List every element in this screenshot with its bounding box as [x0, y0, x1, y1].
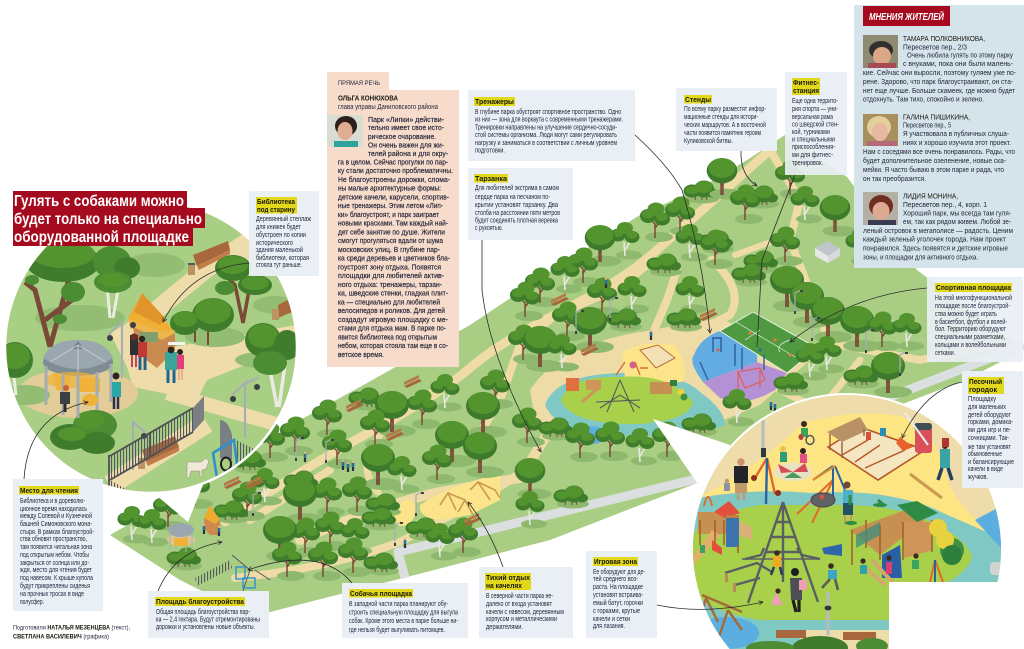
heading: opinions: МНЕНИЯ ЖИТЕЛЕЙ	[869, 10, 945, 23]
panel: quiet rest on swings: Тихий отдых	[486, 574, 530, 582]
panel: direct speech: Парк «Липки» действи-	[368, 116, 445, 124]
panel: dog area	[342, 583, 468, 638]
panel: tarzan swing: с рукоятью.	[475, 225, 503, 232]
panel: direct speech: детские качели, карусели, спортив-	[338, 194, 450, 202]
panel: fitness station: кой, турниками	[792, 128, 830, 136]
panel: library: исторического	[256, 240, 293, 247]
panel: direct speech: телей района и для окру-	[368, 150, 449, 158]
panel: quiet rest on swings: В северной части парка не-	[486, 592, 553, 600]
opinion: Lidia	[863, 194, 1013, 262]
panel: sand town: Площадку	[968, 396, 996, 403]
small gazebo and library	[167, 505, 220, 552]
opinion: Lidia: понравился. Здесь появятся и детские игровые	[863, 246, 1008, 252]
panel: reading place: ства обновят пространство,	[20, 535, 87, 543]
panel: sports ground: ства можно будет играть	[935, 310, 997, 318]
panel: reading place: закрыться от солнца или до-	[20, 560, 89, 567]
panel: trainers: Тренировки направлены на улучшение сердечно-сосуди-	[475, 124, 618, 132]
panel: tarzan swing: крытии установят тарзанку. Два	[475, 202, 558, 209]
panel: direct speech: ные тренажеры. Этим летом «Лип-	[338, 203, 444, 210]
title: Гулять с собаками можно	[14, 193, 184, 210]
panel: library: для книжек будет	[256, 223, 302, 231]
panel: library: под старину	[257, 207, 295, 214]
panel: reading place: на прочных тросах в виде	[20, 591, 84, 598]
panel: play zone: раста. На площадке	[593, 584, 643, 591]
panel: direct speech: московских улиц. В глубине пар-	[338, 246, 441, 254]
dog and tire frame	[186, 438, 238, 478]
left circle paths	[18, 240, 296, 485]
photo: Tamara	[863, 35, 898, 68]
title	[13, 191, 205, 246]
panel: direct speech: стами для отдыха мам. В парке по-	[338, 326, 447, 333]
opinion: Galina	[863, 114, 1015, 183]
big trees in circle	[6, 246, 296, 454]
panel: sand town: городок	[969, 387, 998, 394]
panel: library: стояла тут раньше.	[256, 262, 302, 269]
white wedge to right circle	[653, 419, 730, 500]
panel: quiet rest on swings: далеко от входа установят	[486, 601, 553, 608]
panel: trainers: из них — зона для воркаута с современными тренажерами.	[475, 116, 623, 124]
opinion: Tamara: с внуками, пока они были малень-	[903, 60, 1014, 68]
panel: sand town	[962, 371, 1023, 488]
panel: fitness station: ми для фитнес-	[792, 152, 834, 159]
panel: library: Библиотека	[257, 198, 295, 206]
panel: direct speech: ка — специально для любителей	[338, 298, 440, 306]
opinion: Tamara: рене. Здорово, что парк благоустраивают, он ста-	[863, 78, 1014, 86]
panel: sand town: ми для игр и пе-	[968, 427, 1012, 434]
panel: improvement area: ка — 2,4 гектара. Будут отремонтированы	[156, 616, 260, 624]
panel: direct speech: ОЛЬГА КОНЮХОВА	[338, 96, 398, 102]
opinion: Lidia: каждый зеленый уголочек города. Нам проект	[863, 236, 1007, 244]
arrow: quiet swings	[468, 502, 503, 567]
people at library	[130, 334, 185, 383]
photo: Galina	[863, 114, 898, 146]
panel: direct speech: ки» благоустроят, и парк заиграет	[338, 211, 440, 219]
panel: direct speech: новыми красками. Там каждый най-	[338, 220, 449, 228]
kids near net	[771, 550, 838, 612]
panel: trainers	[468, 90, 635, 161]
panel: direct speech: ку стали достаточно проблематичны.	[338, 167, 453, 175]
panel: play zone: с горками, крутые	[593, 608, 640, 615]
panel: library: библиотеки, которая	[256, 254, 309, 262]
leader arrows	[24, 135, 962, 609]
net pyramid small	[596, 380, 640, 412]
panel: sand town: Песочный	[969, 378, 1002, 386]
trees of the park	[118, 158, 924, 581]
panel: sports ground: сетками.	[935, 350, 955, 357]
panel: tarzan swing: сердце парка на песчаном по-	[475, 194, 551, 201]
panel: quiet rest on swings: качели с навесом, деревянным	[486, 609, 564, 616]
title: будет только на специально	[14, 211, 202, 228]
panel: reading place: там появится читальная зона	[20, 544, 92, 551]
panel: improvement area: дорожки и установлены новые объекты.	[156, 623, 255, 631]
panel: stands: Стенды	[685, 97, 711, 104]
gray road	[398, 345, 1024, 578]
panel: dog area: строить специальную площадку для выгула	[349, 610, 458, 616]
house	[815, 241, 840, 263]
panel: play zone: качели и сетки	[593, 616, 630, 623]
small fenced dog zone	[195, 555, 270, 600]
seesaw	[910, 474, 942, 498]
panel: reading place: ждя, место для чтения будет	[20, 566, 93, 574]
panel: play zone: для лазания.	[593, 623, 625, 630]
panel: dog area: В западной части парка планируют обу-	[349, 600, 449, 608]
arrow: play zone	[657, 602, 763, 609]
panel: direct speech: гоустроят зону отдыха. Появятся	[338, 264, 441, 272]
panel: fitness station: со шведской стен-	[792, 120, 840, 128]
panel: trainers: нагрузку и заниматься в соответствии с личным уровнем	[475, 140, 617, 147]
lamp	[761, 420, 766, 458]
opinion: Tamara: ТАМАРА ПОЛКОВНИКОВА,	[903, 36, 985, 43]
gazebo	[43, 340, 121, 418]
arrow: tarzan	[482, 240, 541, 452]
panel: direct speech: глава управы Даниловского района	[338, 103, 438, 111]
panel: tarzan swing: Тарзанка	[475, 176, 507, 183]
panel: library	[249, 191, 319, 276]
white wedge to left circle	[150, 480, 205, 522]
man with child	[938, 438, 952, 480]
panel: reading place: ционное время находилась	[20, 506, 87, 513]
panel: sports ground: кольцами и волейбольными	[935, 341, 1006, 349]
panel: quiet rest on swings: корпусом и металлическими	[486, 616, 557, 623]
panel: sand town: же там установят	[968, 444, 1012, 451]
panel: improvement area: Площадь благоустройства	[156, 598, 244, 606]
panel: library: Деревянный стеллаж	[256, 215, 311, 223]
credits: Подготовили НАТАЛЬЯ МЕЗЕНЦЕВА (текст),	[13, 624, 130, 632]
panel: fitness station	[785, 72, 847, 175]
panel: direct speech: велосипедов и роликов. Для детей	[338, 307, 445, 315]
panel: reading place: башней Симоновского мона-	[20, 520, 93, 528]
panel: fitness station: рия спорта — уни-	[792, 106, 839, 113]
panel: improvement area	[148, 591, 269, 638]
photo: Lidia	[863, 192, 898, 225]
heading: opinions	[863, 6, 950, 26]
panel: direct speech: Он очень важен для жи-	[368, 142, 445, 150]
arrow: library	[163, 263, 249, 322]
panel: dog area: собак. Кроме этого места в парке больше ни-	[349, 617, 458, 625]
lime zone	[692, 505, 972, 620]
panel: direct speech: га в целом. Сейчас прогулки по пар-	[338, 158, 449, 166]
panel: stands: части появится памятник героям	[684, 130, 761, 137]
net swing	[797, 466, 845, 523]
right play structure	[822, 495, 964, 585]
panel: sand town: для маленьких	[968, 404, 1006, 411]
panel: sand town: жучков.	[968, 474, 988, 481]
panel: direct speech: площадки для любителей актив-	[338, 272, 445, 280]
panel: fitness station: Еще одна террито-	[792, 98, 838, 105]
blue puddle and sand bottom	[710, 617, 759, 649]
credits	[13, 624, 130, 640]
quiet swings zone	[389, 474, 500, 530]
park map	[110, 135, 1024, 615]
playground zones	[545, 344, 725, 444]
bench and bin	[138, 241, 292, 469]
photo: Olga Konyukhova	[327, 115, 363, 147]
opinion: Galina: мейки. Я часто бываю в этом парке и рада, что	[863, 166, 1004, 174]
panel: sports ground: Спортивная площадка	[936, 285, 1011, 292]
park ground	[110, 135, 1024, 615]
panel: fitness station: Фитнес-	[793, 80, 820, 87]
panel: direct speech: Не благоустроены дорожки, слома-	[338, 176, 451, 184]
panel: stands: мационные стенды для истори-	[684, 114, 758, 121]
panel: play zone: Ее оборудуют для де-	[593, 568, 645, 576]
credits: СВЕТЛАНА ВАСИЛЕВИЧ (графика)	[13, 634, 109, 640]
opinion: Tamara: нет еще лучше. Больше скамеек, где можно будет	[863, 87, 1016, 95]
panel: direct speech: ветское время.	[338, 352, 384, 359]
panel: direct speech: ного отдыха: тренажеры, тарзан-	[338, 282, 443, 289]
left circle shadows	[0, 253, 297, 405]
arrow: fitness	[757, 175, 795, 347]
opinion: Galina: Пересветов пер., 5	[903, 122, 951, 130]
title: оборудованной площадке	[14, 229, 189, 246]
panel: sand town: горками, домика-	[968, 419, 1014, 426]
panel: tarzan swing: столба на расстоянии пяти метров	[475, 209, 560, 217]
opinion: Galina: ниях и хорошо изучила этот проект.	[903, 140, 1011, 147]
panel: direct speech: ны малые архитектурные формы:	[338, 186, 441, 193]
sand plaza	[530, 318, 810, 440]
panel: tarzan swing: Для любителей экстрима в самом	[475, 184, 559, 192]
panel: direct speech: ка среди деревьев и цветников бла-	[338, 255, 451, 263]
arrow: sand town	[902, 382, 962, 438]
panel: direct speech: создадут игровую площадку с ме-	[338, 317, 449, 324]
arrow: improvement area	[158, 542, 222, 591]
panel: sand town: качели в виде	[968, 466, 1003, 473]
panel: reading place: будут прикреплены сиденья	[20, 582, 90, 590]
bottom lamp benches bushes	[746, 592, 888, 649]
panel: improvement area: Общая площадь благоустройства пар-	[156, 608, 250, 616]
panel: dog area: Собачья площадка	[350, 590, 412, 598]
panel: play zone: тей среднего воз-	[593, 575, 639, 583]
panel: trainers: подготовки.	[475, 148, 505, 154]
panel: reading place: под открытым небом. Чтобы	[20, 551, 89, 559]
opinion: Tamara	[863, 36, 1017, 104]
panel: direct speech: смогут прогуляться вдали от шума	[338, 238, 443, 245]
panel: tarzan swing: будет соединять плотная веревка	[475, 216, 558, 224]
opinion: Lidia: ЛИДИЯ МОНИНА,	[903, 194, 958, 200]
arrow: dog area	[248, 560, 352, 583]
opinion: Lidia: Пересветов пер., 4, корп. 1	[903, 202, 987, 209]
opinion: Lidia: ем, так как рядом живем. Любой зе-	[903, 218, 1012, 226]
panel: dog area: где нельзя будет выгуливать питомцев.	[349, 626, 445, 634]
panel: stands: Куликовской битвы.	[684, 137, 733, 145]
panel: play zone: Игровая зона	[594, 559, 637, 566]
opinion: Galina: Я участвовала в публичных слуша-	[903, 130, 1010, 138]
bottom swing	[700, 595, 742, 640]
opinion: Tamara: Пересветов пер., 2/3	[903, 44, 967, 52]
panel: reading place: стыря. В рамках благоустрой-	[20, 528, 95, 536]
panel: fitness station: версальная рама	[792, 114, 833, 121]
panel: play zone: установят встраива-	[593, 592, 643, 599]
panel: reading place: между Солевой и Кузнечной	[20, 512, 92, 520]
panel: quiet rest on swings: на качелях	[486, 583, 522, 590]
opinion: Lidia: Хороший парк, мы всегда там гуля-	[903, 210, 1012, 218]
panel: sand town: обыкновенные	[968, 450, 1002, 458]
opinion: Tamara: кие. Сейчас они выросли, поэтому гуляем уже по-	[863, 69, 1017, 77]
arrow: sports ground	[790, 288, 927, 342]
panel: fitness station: тренировок.	[792, 160, 823, 167]
yellow sand zone	[700, 414, 1010, 600]
panel: residents' opinions	[854, 5, 1024, 268]
panel: direct speech: рическое очарование.	[368, 134, 436, 141]
panel: fitness station: станция	[793, 88, 819, 95]
small figure at right edge	[990, 562, 1000, 575]
opinion: Galina: ГАЛИНА ПИШИКИНА,	[903, 114, 970, 122]
teal zone	[690, 491, 1005, 649]
panel: stands: По всему парку разместят инфор-	[684, 106, 766, 113]
panel: trainers: Тренажеры	[475, 99, 514, 106]
sports ground	[692, 312, 817, 402]
panel: quiet rest on swings	[479, 567, 573, 638]
panel: sand town: детей оборудуют	[968, 411, 1012, 419]
panel: stands	[676, 88, 777, 151]
lamps in circle	[107, 322, 260, 470]
panel: sand town: сочницами. Так-	[968, 435, 1010, 442]
fence and gate	[108, 396, 254, 490]
arrow: trainers	[635, 135, 710, 333]
panel: direct speech: явится библиотека под открытым	[338, 334, 437, 342]
panel: reading place	[13, 479, 103, 611]
arrow: stands	[741, 151, 757, 186]
circle: children's playground	[690, 390, 1010, 649]
panel: play zone: емый батут, горочки	[593, 599, 643, 607]
circle: library and reading place	[6, 206, 296, 492]
panel: direct speech: ПРЯМАЯ РЕЧЬ	[338, 80, 380, 87]
panel: reading place: полусфер.	[20, 599, 44, 606]
panel: direct speech: небом, которая стояла там еще в со-	[338, 342, 449, 350]
left play tower	[692, 497, 752, 567]
panel: play zone	[586, 551, 657, 638]
panel: sports ground	[927, 277, 1023, 362]
panel: fitness station: и специальными	[792, 136, 835, 144]
panel: direct speech	[327, 72, 459, 367]
panel: direct speech: тельно имеет свое исто-	[368, 125, 445, 132]
panel: library: здания маленькой	[256, 246, 303, 254]
opinion: Lidia: леный островок в мегаполисе — радость. Ценим	[863, 227, 1013, 235]
panel: reading place: Место для чтения	[20, 488, 78, 495]
sandbox	[827, 413, 932, 480]
opinion: Tamara: отдохнуть. Там тихо, спокойно и зелено.	[863, 96, 984, 104]
sand paths	[225, 150, 1000, 578]
panel: direct speech: ка, шведские стенки, гладкая плит-	[338, 291, 449, 298]
swing with orange legs	[751, 458, 781, 504]
panel: library: обустроен по копии	[256, 231, 306, 239]
child on tricycle	[798, 421, 814, 444]
panel: stands: ческих маршрутов. А в восточной	[684, 121, 766, 129]
panel: tarzan swing	[468, 168, 573, 240]
panel: reading place: под навесом. К крыше купола	[20, 575, 93, 582]
library kiosk	[128, 293, 175, 368]
arrow: reading place	[24, 402, 88, 479]
panel: trainers: стой системы организма. Люди могут сами регулировать	[475, 131, 617, 139]
panel: direct speech: дет себе занятие по душе. Жители	[338, 228, 445, 236]
opinion: Lidia: зоны, и площадки для активного отдыха.	[863, 254, 978, 262]
panel: sports ground: специальными разметками,	[935, 334, 1005, 341]
woman near swing	[843, 482, 853, 524]
opinion: Galina: он так преобразится.	[863, 175, 926, 183]
panel: trainers: В глубине парка обустроят спортивное пространство. Одно	[475, 108, 621, 116]
man with boy	[724, 458, 748, 500]
benches and lamps	[224, 278, 908, 548]
panel: reading place: Библиотека и в дореволю-	[20, 497, 85, 505]
net pyramid	[725, 502, 820, 603]
panel: quiet rest on swings: держателями.	[486, 624, 523, 631]
merry-go-round	[774, 446, 812, 481]
panel: fitness station: приспособления-	[792, 143, 836, 151]
opinion: Galina: будет дополнительное озеленение, новые ска-	[863, 157, 1007, 165]
